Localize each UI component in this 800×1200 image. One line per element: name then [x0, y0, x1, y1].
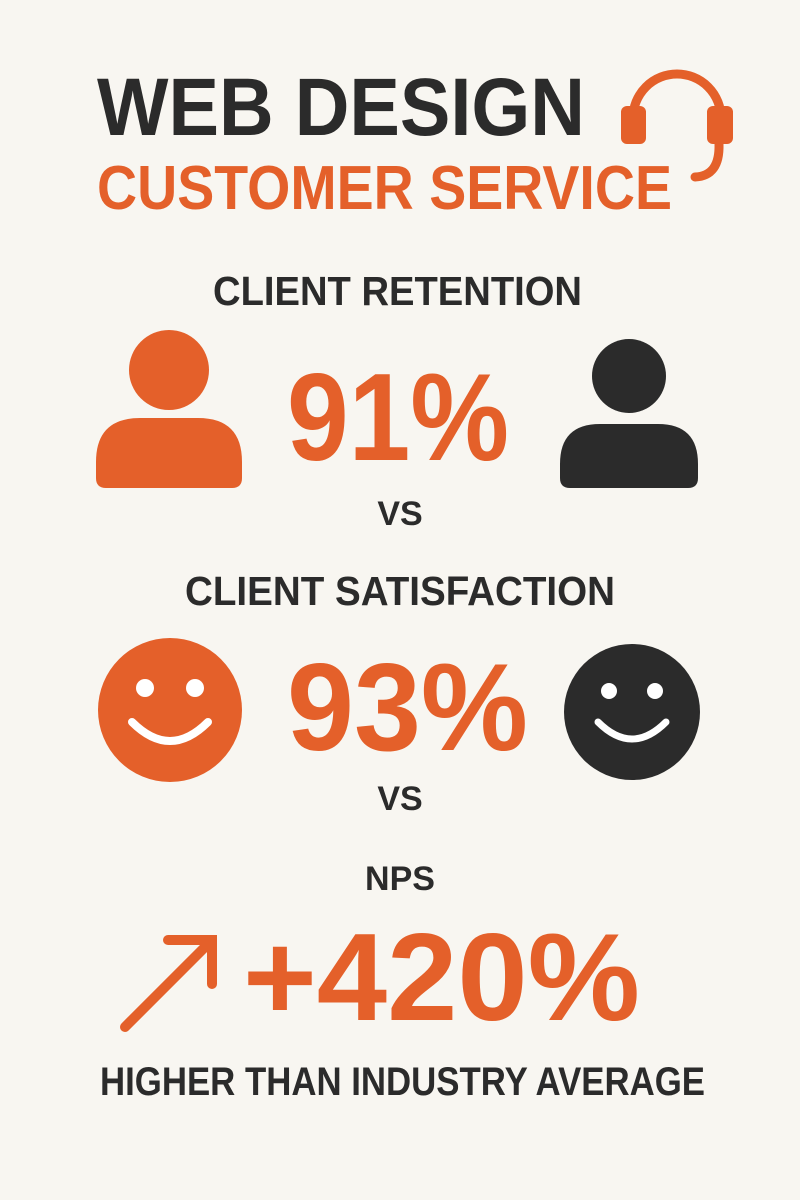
heading: client satisfaction: CLIENT SATISFACTION: [185, 568, 615, 614]
stat: 93%: 93%: [287, 639, 528, 777]
icon: orange smiley: [98, 638, 242, 782]
title: WEB DESIGN: [97, 62, 585, 153]
icon: arrow: [125, 940, 212, 1027]
title: CUSTOMER SERVICE: [97, 154, 672, 223]
vs: VS: [377, 495, 423, 533]
heading: client retention: CLIENT RETENTION: [213, 268, 582, 314]
icon: headset: [621, 74, 733, 177]
vs: VS: [377, 780, 423, 818]
heading: nps: NPS: [365, 860, 435, 898]
caption: HIGHER THAN INDUSTRY AVERAGE: [100, 1060, 705, 1104]
icon: orange person: [96, 330, 242, 488]
stat: +420%: +420%: [243, 909, 640, 1047]
icon: dark person: [560, 339, 698, 488]
title: [97, 62, 672, 223]
stat: 91%: 91%: [287, 349, 509, 487]
icon: dark smiley: [564, 644, 700, 780]
